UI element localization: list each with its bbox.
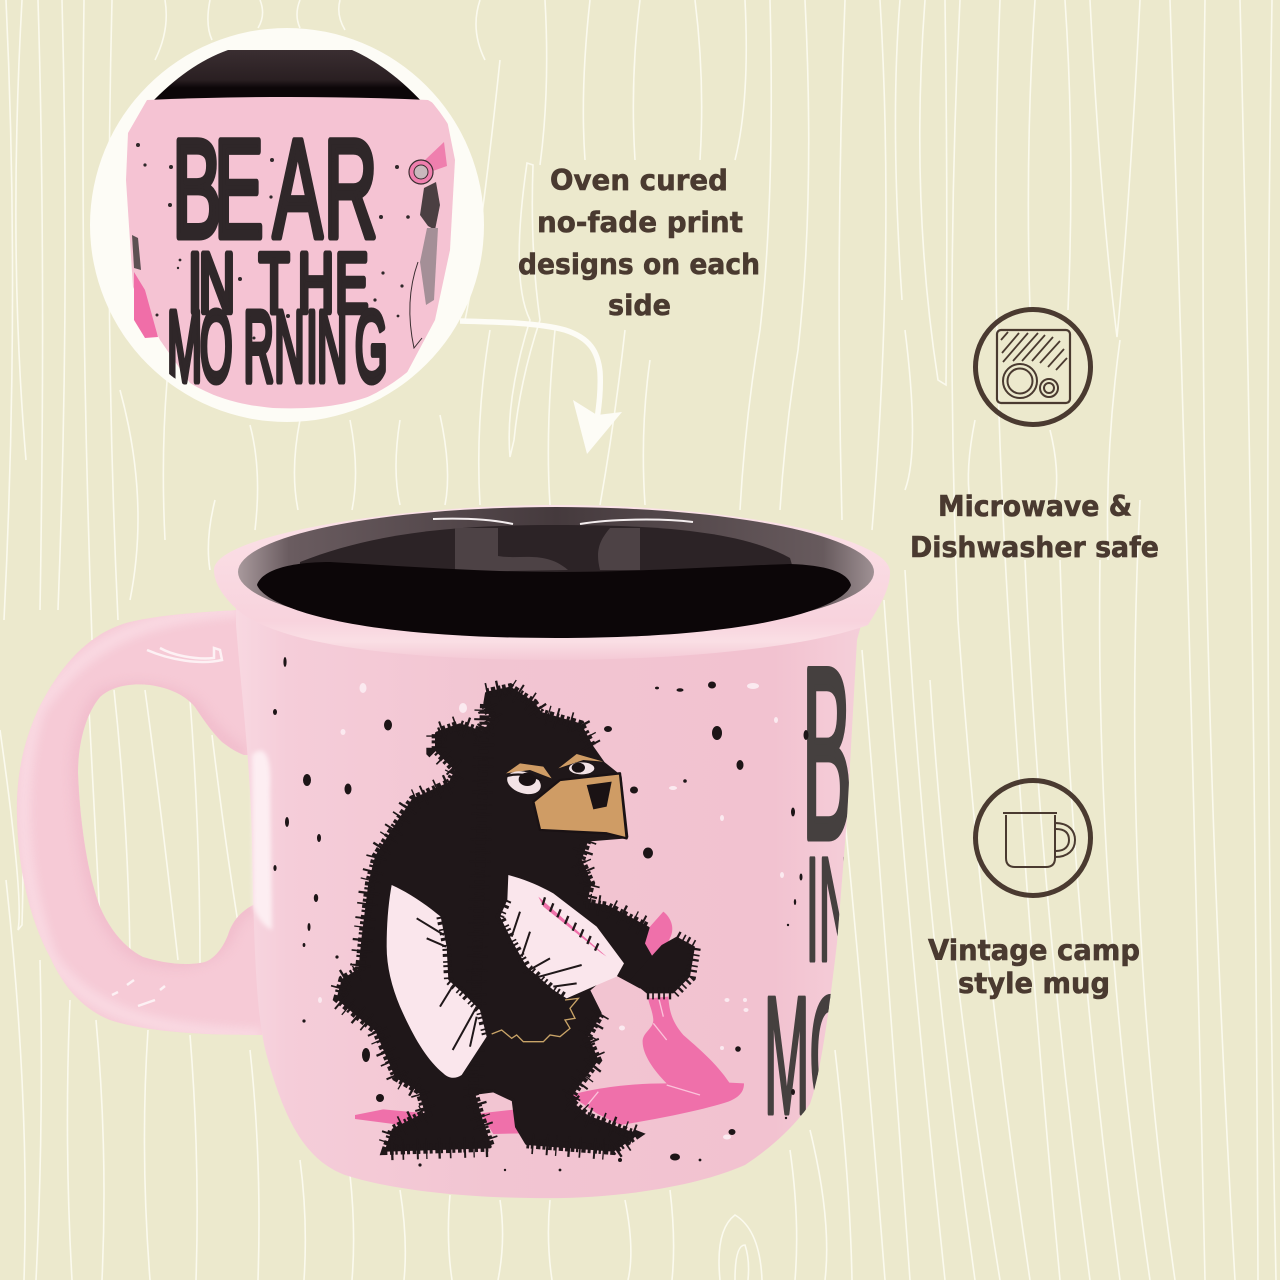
text block: vintage camp style mug	[928, 934, 1140, 1000]
mug side lettering: partial words wrapping out of view: MO	[764, 963, 852, 1149]
infographic canvas: BE	[802, 616, 902, 890]
mug body pink	[126, 97, 455, 408]
main mug	[17, 505, 902, 1198]
mug interior	[150, 50, 424, 104]
mug body	[236, 600, 868, 1198]
icon: dishwasher safe	[976, 310, 1090, 424]
text block: oven cured: designs on each	[518, 248, 760, 281]
text block: microwave and dishwasher safe: Dishwasher safe	[910, 531, 1159, 564]
blanket in hand	[645, 912, 672, 965]
speckles: black	[273, 657, 808, 1171]
mug handle	[17, 610, 262, 1035]
gold torn seam	[492, 998, 578, 1042]
hand fur	[630, 937, 695, 993]
text block: microwave and dishwasher safe: Microwave &	[938, 490, 1132, 523]
speckles	[136, 143, 410, 340]
pillow: left	[387, 885, 487, 1078]
mug side lettering: partial words wrapping out of view	[768, 666, 849, 1116]
text block: vintage camp style mug: Vintage camp	[928, 934, 1140, 967]
text block: oven cured	[518, 164, 760, 322]
text block: vintage camp style mug: style mug	[958, 967, 1110, 1000]
inset: close-up of mug lettering	[90, 28, 484, 422]
mug rim	[214, 505, 890, 660]
speckles: white	[318, 683, 784, 1140]
illustration: grumpy bear with pillows and blanket	[338, 688, 744, 1150]
bear muzzle	[533, 773, 627, 838]
text block: oven cured: no-fade print	[537, 206, 743, 239]
pillow tear	[538, 897, 607, 957]
pillow: right	[500, 875, 624, 998]
icon: hair dryer and bear fragment	[409, 142, 447, 348]
bear fragment, blanket on left edge	[132, 235, 158, 338]
bear brows	[506, 754, 603, 778]
arrow: from inset to mug	[460, 321, 622, 454]
bear nose	[587, 782, 612, 809]
interior shading	[300, 525, 795, 575]
interior deep black	[257, 562, 851, 638]
lettering: BEAR IN THE MORNING: MORNING	[167, 292, 388, 403]
rim highlights	[433, 519, 693, 524]
blanket pool on floor	[355, 997, 744, 1134]
blanket highlights	[583, 997, 700, 1110]
mug interior wall	[238, 507, 874, 637]
lettering: BEAR IN THE MORNING: IN THE	[188, 236, 369, 330]
mug side lettering: partial words wrapping out of view: IN	[806, 828, 852, 992]
pillow fold lines	[417, 912, 582, 1050]
icon: camp mug	[976, 780, 1090, 896]
text block: microwave and dishwasher safe	[910, 490, 1159, 564]
lettering: BEAR IN THE MORNING: BEAR	[172, 111, 377, 267]
bear body with fur	[338, 688, 657, 1150]
body highlight	[252, 751, 272, 930]
interior reflections	[455, 528, 640, 572]
lettering: BEAR IN THE MORNING	[169, 137, 386, 386]
text block: oven cured: side	[608, 289, 671, 322]
fur overlapping the pillows	[441, 900, 567, 1037]
text block: oven cured: Oven cured	[550, 164, 728, 197]
bear eyes	[504, 762, 594, 798]
